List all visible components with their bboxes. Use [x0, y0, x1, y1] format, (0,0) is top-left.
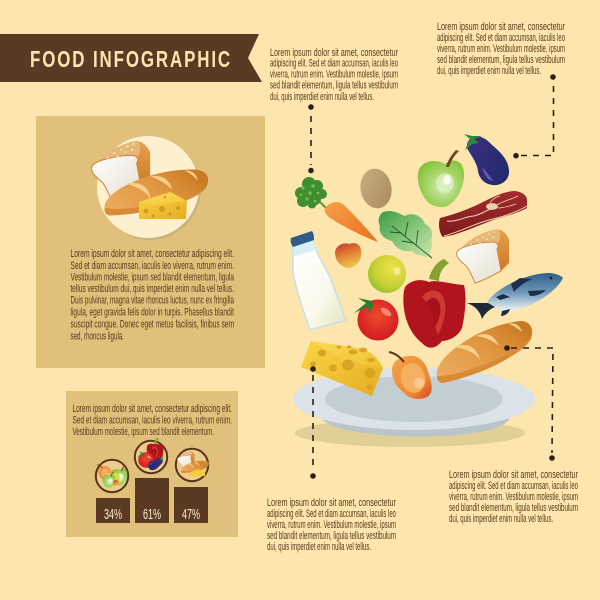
icon: fruit circle: [96, 460, 128, 492]
panel text: sed, rhoncus ligula.: [70, 330, 124, 342]
text block: top centre: viverra, rutrum enim. Vestibulum molestie, ipsum: [270, 68, 398, 80]
icon: parsley: [295, 177, 327, 208]
icon: fish: [467, 273, 563, 319]
icon: baguette: [437, 321, 532, 383]
panel text: Duis pulvinar, magna vitae rhoncus luctus, nunc ex fringilla: [70, 294, 234, 306]
text block: bottom centre: [267, 497, 396, 553]
panel text: [70, 248, 234, 342]
stats text: Lorem ipsum dolor sit amet, consectetur adipiscing elit.: [72, 403, 232, 415]
icon: meat: [439, 191, 527, 237]
icon: green apple: [418, 150, 464, 207]
text block: top centre: [270, 47, 398, 103]
title banner: [0, 34, 262, 82]
icon: bread and cheese: [92, 136, 210, 240]
icon: eggplant: [464, 134, 509, 185]
panel text: ligula, eget gravida felis dolor in turpis. Phasellus blandit: [70, 306, 234, 318]
panel text: tellus vestibulum dui, quis imperdiet enim nulla vel tellus.: [70, 283, 234, 295]
icon: potato: [358, 166, 394, 211]
icon: bakery circle: [176, 449, 209, 481]
panel text: Vestibulum molestie, ipsum sed blandit elementum, ligula: [70, 272, 234, 284]
text block: bottom centre: viverra, rutrum enim. Vestibulum molestie, ipsum: [267, 519, 396, 531]
connector: top centre text to parsley: [308, 104, 314, 173]
bar: vegetables 61%: 61%: [143, 507, 161, 523]
text block: bottom centre: adipiscing elit. Sed et diam accumsan, iaculis leo: [267, 508, 396, 520]
text block: top centre: sed blandit elementum, ligula tellus vestibulum: [270, 80, 398, 92]
stats text: Sed et diam accumsan, iaculis leo viverra, rutrum enim.: [72, 414, 232, 426]
bar: fruit 34%: 34%: [104, 507, 122, 523]
icon: small apple: [335, 243, 361, 268]
panel: bakery and dairy: [36, 116, 265, 368]
banner ribbon: [0, 34, 262, 82]
panel text: Sed et diam accumsan, iaculis leo viverra, rutrum enim.: [70, 260, 234, 272]
title: FOOD INFOGRAPHIC: [30, 46, 230, 73]
stats text: Vestibulum molestie, ipsum sed blandit elementum.: [72, 426, 214, 438]
icon: red pepper: [403, 259, 465, 348]
icon: bread: [457, 229, 509, 283]
bar: bakery 47%: [174, 487, 208, 523]
icon: tomato: [354, 298, 398, 340]
icon: milk bottle: [291, 231, 346, 330]
plate: [293, 368, 535, 447]
connector: cheese to bottom centre text: [310, 366, 316, 479]
text block: top centre: adipiscing elit. Sed et diam accumsan, iaculis leo: [270, 58, 398, 70]
panel text: Lorem ipsum dolor sit amet, consectetur adipiscing elit.: [70, 248, 234, 260]
text block: top centre: Lorem ipsum dolor sit amet, consectetur: [270, 47, 398, 59]
connector: baguette to bottom right text: [504, 345, 555, 461]
text block: top right: [437, 21, 565, 77]
icon: carrot: [325, 202, 378, 242]
panel: statistics: [66, 391, 238, 537]
panel background: [66, 391, 238, 537]
icon: cheese wedge: [301, 341, 383, 396]
icon: orange apple: [389, 352, 432, 399]
stats text: [72, 403, 232, 438]
text block: bottom centre: Lorem ipsum dolor sit amet, consectetur: [267, 497, 396, 509]
icon: lettuce: [379, 211, 433, 259]
text block: bottom centre: dui, quis imperdiet enim nulla vel tellus.: [267, 541, 371, 553]
panel background: [36, 116, 265, 368]
text block: top centre: dui, quis imperdiet enim nulla vel tellus.: [270, 91, 374, 103]
panel text: suscipit congue. Donec eget metus facilisis, finibus sem: [70, 318, 234, 330]
connector: top right text to eggplant: [513, 74, 556, 158]
bar: bakery 47%: 47%: [182, 507, 200, 523]
bar: vegetables 61%: [135, 478, 169, 523]
text block: bottom right: [449, 469, 578, 525]
bar: fruit 34%: [96, 498, 130, 523]
text block: bottom centre: sed blandit elementum, ligula tellus vestibulum: [267, 530, 396, 542]
icon: lime: [368, 255, 406, 293]
icon: vegetable circle: [135, 438, 167, 473]
